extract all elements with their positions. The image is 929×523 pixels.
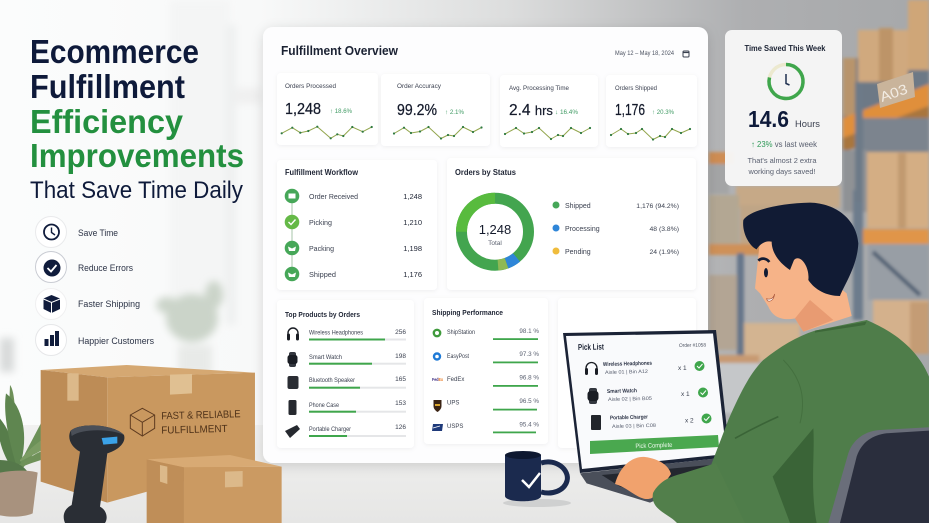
- product: smart watch: Smart Watch: [309, 354, 342, 361]
- title: Efficiency: [30, 103, 184, 140]
- step: order received: Order Received: [309, 192, 358, 201]
- warehouse shelves: [709, 0, 929, 413]
- illustration: desk plant: [0, 385, 70, 517]
- box logo: [130, 408, 155, 436]
- illustration: large cardboard box with label: [41, 365, 255, 503]
- product: portable charger: 126: [395, 424, 406, 431]
- carrier: shipstation: [434, 328, 539, 340]
- illustration: laptop with pick list: [563, 330, 730, 503]
- hair: [743, 203, 858, 296]
- card: time saved this week: ↑ 23% vs last week: [751, 140, 818, 149]
- window frames: [0, 0, 263, 372]
- card: time saved this week: Hours: [795, 119, 820, 130]
- blurred indoor plant: [156, 281, 223, 375]
- product: wireless headphones: Wireless Headphones: [309, 330, 364, 336]
- pick item: portable charger: x 2: [685, 418, 694, 424]
- carrier: usps: [432, 422, 539, 433]
- carrier: usps: 95.4 %: [519, 422, 539, 428]
- panel: fulfillment workflow: Fulfillment Workflow: [285, 168, 359, 177]
- step: order received: 1,248: [403, 192, 422, 201]
- panel: top products by orders: Top Products by Orders: [285, 310, 360, 319]
- carrier: usps: USPS: [447, 424, 463, 430]
- benefit: faster shipping: Faster Shipping: [78, 299, 140, 310]
- panel: fulfillment workflow: [277, 160, 437, 290]
- step: shipped: [285, 267, 422, 281]
- product: phone case: Phone Case: [309, 402, 339, 409]
- KPI card: order accuracy: [381, 74, 490, 146]
- KPI card: orders processed: [277, 73, 378, 145]
- illustration: large cardboard box with label: FULFILLMENT: [161, 424, 228, 437]
- illustration: chair: [828, 427, 929, 523]
- product: wireless headphones: [287, 328, 406, 340]
- legend: processing: [552, 224, 679, 233]
- panel: shipping performance: Shipping Performance: [432, 308, 503, 317]
- product: portable charger: Portable Charger: [309, 426, 352, 433]
- panel: shipping performance: [424, 298, 548, 444]
- pick item: wireless headphones: Aisle 01 | Bin A12: [605, 369, 648, 376]
- KPI card: average processing time: 2.4 hrs: [509, 102, 553, 119]
- KPI card: orders processed: 1,248: [285, 101, 321, 118]
- pick list content: Pick List: [578, 342, 604, 352]
- carrier: fedex: [432, 374, 539, 387]
- carrier: ups: UPS: [447, 400, 459, 406]
- carrier: easypost: 97.3 %: [519, 351, 539, 358]
- laptop screen: [563, 330, 730, 473]
- KPI card: orders processed: ↑ 18.6%: [330, 108, 352, 115]
- carrier: ups: [434, 398, 539, 412]
- legend: shipped: [552, 202, 679, 210]
- benefit: reduce errors: Reduce Errors: [78, 263, 133, 274]
- product: bluetooth speaker: Bluetooth Speaker: [309, 377, 356, 384]
- illustration: small cardboard box: [147, 455, 282, 523]
- product: portable charger: [285, 424, 406, 438]
- step: shipped: 1,176: [403, 270, 422, 279]
- step: order received: [285, 189, 422, 203]
- pick item: smart watch: Smart Watch: [607, 388, 638, 395]
- step: picking: [285, 215, 422, 229]
- card: time saved this week: working days saved!: [748, 167, 816, 176]
- laptop base: [580, 458, 727, 503]
- illustration: coffee mug: [503, 451, 571, 507]
- step: packing: 1,198: [403, 244, 422, 253]
- shirt: [653, 320, 929, 523]
- carrier: fedex: FedEx: [432, 377, 444, 382]
- carrier: ups: 96.5 %: [519, 398, 539, 405]
- step: shipped: Shipped: [309, 270, 336, 279]
- card: time saved this week: [725, 30, 842, 186]
- step: packing: [285, 241, 422, 255]
- panel: orders by status: Orders by Status: [455, 168, 517, 177]
- pick complete button: [590, 435, 719, 454]
- donut chart: 1,248: [479, 222, 511, 237]
- legend: shipped: Shipped: [565, 203, 591, 210]
- KPI card: order accuracy: Order Accuracy: [397, 83, 442, 90]
- benefit: happier customers: Happier Customers: [78, 336, 154, 347]
- pick item: portable charger: Portable Charger: [610, 414, 649, 421]
- progress ring with clock: [769, 64, 803, 98]
- KPI card: orders shipped: ↑ 20.3%: [652, 109, 674, 116]
- legend: pending: [552, 248, 679, 256]
- step: picking: 1,210: [403, 218, 422, 227]
- KPI card: average processing time: ↓ 16.4%: [555, 109, 578, 116]
- title: [30, 33, 244, 204]
- product: bluetooth speaker: 165: [395, 376, 406, 383]
- illustration: barcode scanner: [64, 425, 124, 523]
- donut chart: Total: [488, 240, 502, 247]
- KPI card: order accuracy: ↑ 2.1%: [445, 109, 464, 116]
- carrier: shipstation: ShipStation: [447, 330, 475, 336]
- carrier: fedex: 96.8 %: [519, 374, 539, 382]
- KPI card: orders shipped: Orders Shipped: [615, 85, 657, 92]
- card: time saved this week: 14.6: [748, 106, 789, 132]
- illustration: large cardboard box with label: FAST & RELIABLE: [161, 409, 241, 422]
- date range: May 12 – May 18, 2024: [615, 50, 674, 57]
- panel: top products by orders: [277, 300, 414, 448]
- illustration: person at laptop: [653, 203, 929, 523]
- carrier: easypost: [434, 351, 539, 363]
- illustration: hand on keyboard: [615, 457, 745, 523]
- step: picking: Picking: [309, 218, 332, 227]
- legend: shipped: 1,176 (94.2%): [636, 203, 679, 210]
- benefits list: [36, 216, 154, 356]
- KPI card: orders shipped: [606, 75, 697, 147]
- KPI card: average processing time: Avg. Processing Time: [509, 85, 569, 92]
- pick complete button: Pick Complete: [635, 442, 673, 450]
- product: phone case: 153: [395, 400, 406, 407]
- pick item: smart watch: [588, 388, 708, 404]
- panel: fulfillment overview dashboard: [263, 27, 708, 463]
- face details: [758, 259, 769, 262]
- title: That Save Time Daily: [30, 177, 243, 204]
- legend: processing: Processing: [565, 226, 600, 233]
- pick list content: [578, 342, 719, 454]
- panel: orders by status: [447, 158, 696, 290]
- sparkline: [282, 127, 372, 138]
- KPI card: average processing time: [500, 75, 598, 147]
- sparkline: [505, 128, 590, 139]
- product: phone case: [288, 400, 406, 415]
- pick item: wireless headphones: [585, 361, 704, 376]
- pick item: wireless headphones: x 1: [678, 365, 687, 372]
- sparkline: [611, 129, 690, 140]
- product: smart watch: 198: [395, 353, 406, 360]
- title: Ecommerce: [30, 33, 199, 70]
- product: bluetooth speaker: [288, 376, 406, 389]
- sparkline: [394, 127, 482, 138]
- pick item: portable charger: Aisle 03 | Bin C08: [612, 423, 656, 430]
- product: smart watch: [288, 352, 406, 367]
- donut chart: [462, 198, 528, 265]
- benefit: save time: Save Time: [78, 228, 118, 239]
- product: wireless headphones: 256: [395, 329, 406, 336]
- pick list content: Order #1058: [679, 343, 706, 349]
- ear: [796, 256, 811, 284]
- legend: pending: Pending: [565, 249, 591, 256]
- card: time saved this week: That's almost 2 extra: [748, 156, 817, 165]
- warehouse shelf label A03: A03: [878, 81, 910, 105]
- pick item: portable charger: [591, 414, 712, 430]
- KPI card: orders shipped: 1,176: [615, 102, 645, 119]
- dashboard heading: Fulfillment Overview: [281, 44, 398, 58]
- KPI card: orders processed: Orders Processed: [285, 83, 336, 90]
- legend: pending: 24 (1.9%): [650, 249, 679, 256]
- KPI card: order accuracy: 99.2%: [397, 102, 437, 119]
- title: Fulfillment: [30, 68, 185, 105]
- card: time saved this week: Time Saved This Week: [744, 43, 826, 53]
- step: packing: Packing: [309, 244, 334, 253]
- carrier: fedex: FedEx: [447, 377, 464, 383]
- pick item: smart watch: x 1: [681, 391, 690, 398]
- neck and face: [755, 233, 852, 332]
- pick item: wireless headphones: Wireless Headphones: [603, 361, 652, 368]
- legend: processing: 48 (3.8%): [650, 226, 679, 233]
- desk surface: [0, 425, 929, 523]
- warehouse shelf label A03: [877, 72, 915, 108]
- pick item: smart watch: Aisle 02 | Bin B05: [608, 396, 652, 403]
- carrier: shipstation: 98.1 %: [519, 328, 539, 335]
- carrier: easypost: EasyPost: [447, 354, 469, 360]
- panel: empty third card behind laptop: [558, 298, 696, 448]
- title: Improvements: [30, 137, 244, 174]
